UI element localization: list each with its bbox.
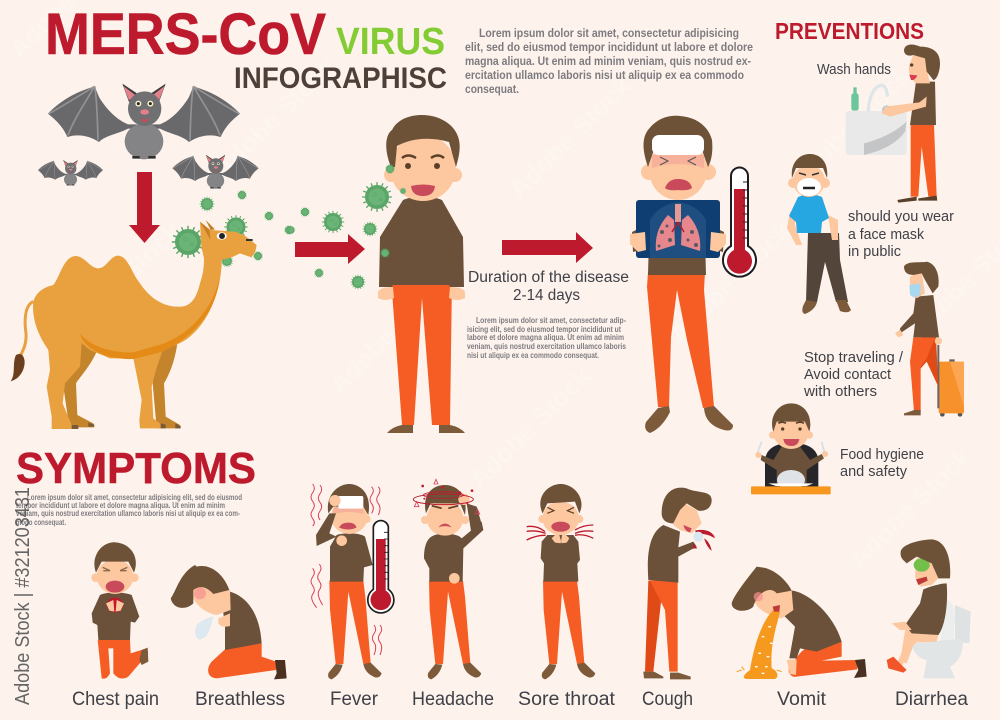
arrow: exposure to disease xyxy=(502,232,593,263)
watermark: Adobe Stock xyxy=(323,265,457,399)
illustration: camel xyxy=(11,220,257,429)
label: stop traveling xyxy=(803,349,904,400)
disease duration text xyxy=(468,269,629,304)
illustration: healthy person xyxy=(378,115,465,433)
title: MERS-CoV xyxy=(45,2,326,67)
title xyxy=(45,2,447,95)
symptom: breathless xyxy=(171,565,287,679)
watermark: Adobe Stock xyxy=(53,215,187,349)
viruses on person xyxy=(380,164,406,258)
icon: small bat right xyxy=(172,155,259,189)
icon: large bat xyxy=(48,84,240,159)
label: vomit: Vomit xyxy=(777,689,827,710)
illustration: sick person with x-ray xyxy=(630,116,733,433)
intro text block: ercitation ullamco laboris nisi ut aliquip ex ea commodo xyxy=(465,70,744,82)
symptom: diarrhea xyxy=(887,539,971,678)
arrow: bat to camel xyxy=(129,172,160,243)
disease duration text: 2-14 days xyxy=(513,287,580,304)
stock watermark: vertical id: Adobe Stock | #321203431 xyxy=(12,487,34,705)
heading: symptoms: SYMPTOMS xyxy=(16,444,256,493)
label: sore throat: Sore throat xyxy=(518,689,616,710)
label: face mask: a face mask xyxy=(848,226,924,243)
label: chest pain: Chest pain xyxy=(72,689,159,710)
symptom: cough xyxy=(643,488,715,679)
intro text block: magna aliqua. Ut enim ad minim veniam, quis nostrud ex- xyxy=(465,56,751,68)
symptom: headache xyxy=(413,479,483,679)
title: VIRUS xyxy=(336,21,445,63)
label: fever: Fever xyxy=(330,689,379,710)
watermark: Adobe Stock xyxy=(843,440,977,574)
label: wash hands: Wash hands xyxy=(817,61,891,78)
symptoms description text xyxy=(16,492,242,527)
symptoms description text: Lorem ipsum dolor sit amet, consectetur adipisicing elit, sed do eiusmod xyxy=(27,492,242,502)
disease description text: nisi ut aliquip ex ea commodo consequat. xyxy=(467,350,599,360)
watermark: Adobe Stock xyxy=(463,360,597,494)
illustration: traveller with suitcase xyxy=(895,262,964,417)
icon: small bat left xyxy=(38,160,103,186)
label: breathless: Breathless xyxy=(195,689,285,710)
label: food hygiene xyxy=(840,446,924,480)
symptom: chest pain xyxy=(91,542,148,679)
watermark xyxy=(3,0,1000,574)
label: diarrhea: Diarrhea xyxy=(895,689,968,710)
viruses behind camel xyxy=(172,190,294,267)
watermark: Adobe Stock xyxy=(208,50,342,184)
label: face mask: in public xyxy=(848,243,901,260)
watermark: Adobe Stock xyxy=(663,215,797,349)
disease description text: labore et dolore magna aliqua. Ut enim ad minim xyxy=(467,332,624,342)
label: stop traveling: with others xyxy=(803,383,877,400)
label: headache: Headache xyxy=(412,689,494,710)
title: INFOGRAPHISC xyxy=(234,62,447,95)
label: stop traveling: Avoid contact xyxy=(804,366,892,383)
watermark: Adobe Stock xyxy=(503,70,637,204)
watermark: Adobe Stock xyxy=(783,60,917,194)
disease description text: Lorem ipsum dolor sit amet, consectetur adip- xyxy=(476,315,626,325)
symptom: vomit xyxy=(732,567,867,679)
illustration: person with face mask xyxy=(787,154,851,314)
heading: preventions: PREVENTIONS xyxy=(775,18,924,44)
label: face mask: should you wear xyxy=(848,208,954,225)
intro text block: Lorem ipsum dolor sit amet, consectetur adipisicing xyxy=(479,28,739,40)
arrow: camel to person xyxy=(295,234,365,264)
label: face mask xyxy=(848,208,954,260)
viruses around person xyxy=(287,183,391,289)
label: food hygiene: and safety xyxy=(840,463,907,480)
illustration: person eating xyxy=(751,403,831,494)
disease description text: veniam, quis nostrud exercitation ullamco laboris xyxy=(467,341,626,351)
symptoms description text: tempor incididunt ut labore et dolore magna aliqua. Ut enim ad minim xyxy=(16,500,225,510)
icon: thermometer xyxy=(723,168,756,277)
label: stop traveling: Stop traveling / xyxy=(804,349,904,366)
symptoms description text: veniam, quis nostrud exercitation ullamco laboris nisi ut aliquip ex ea com- xyxy=(16,508,240,518)
label: food hygiene: Food hygiene xyxy=(840,446,924,463)
intro text block: elit, sed do eiusmod tempor incididunt ut labore et dolore xyxy=(465,42,753,54)
symptoms description text: modo consequat. xyxy=(16,517,66,527)
disease description text: isicing elit, sed do eiusmod tempor incididunt ut xyxy=(467,324,621,334)
illustration: washing hands xyxy=(846,44,940,203)
disease duration text: Duration of the disease xyxy=(468,269,629,286)
symptom: fever xyxy=(311,484,394,679)
label: cough: Cough xyxy=(642,689,693,710)
intro text block xyxy=(465,28,753,96)
symptom: sore throat xyxy=(527,484,595,679)
intro text block: consequat. xyxy=(465,84,519,96)
disease description text xyxy=(467,315,626,360)
